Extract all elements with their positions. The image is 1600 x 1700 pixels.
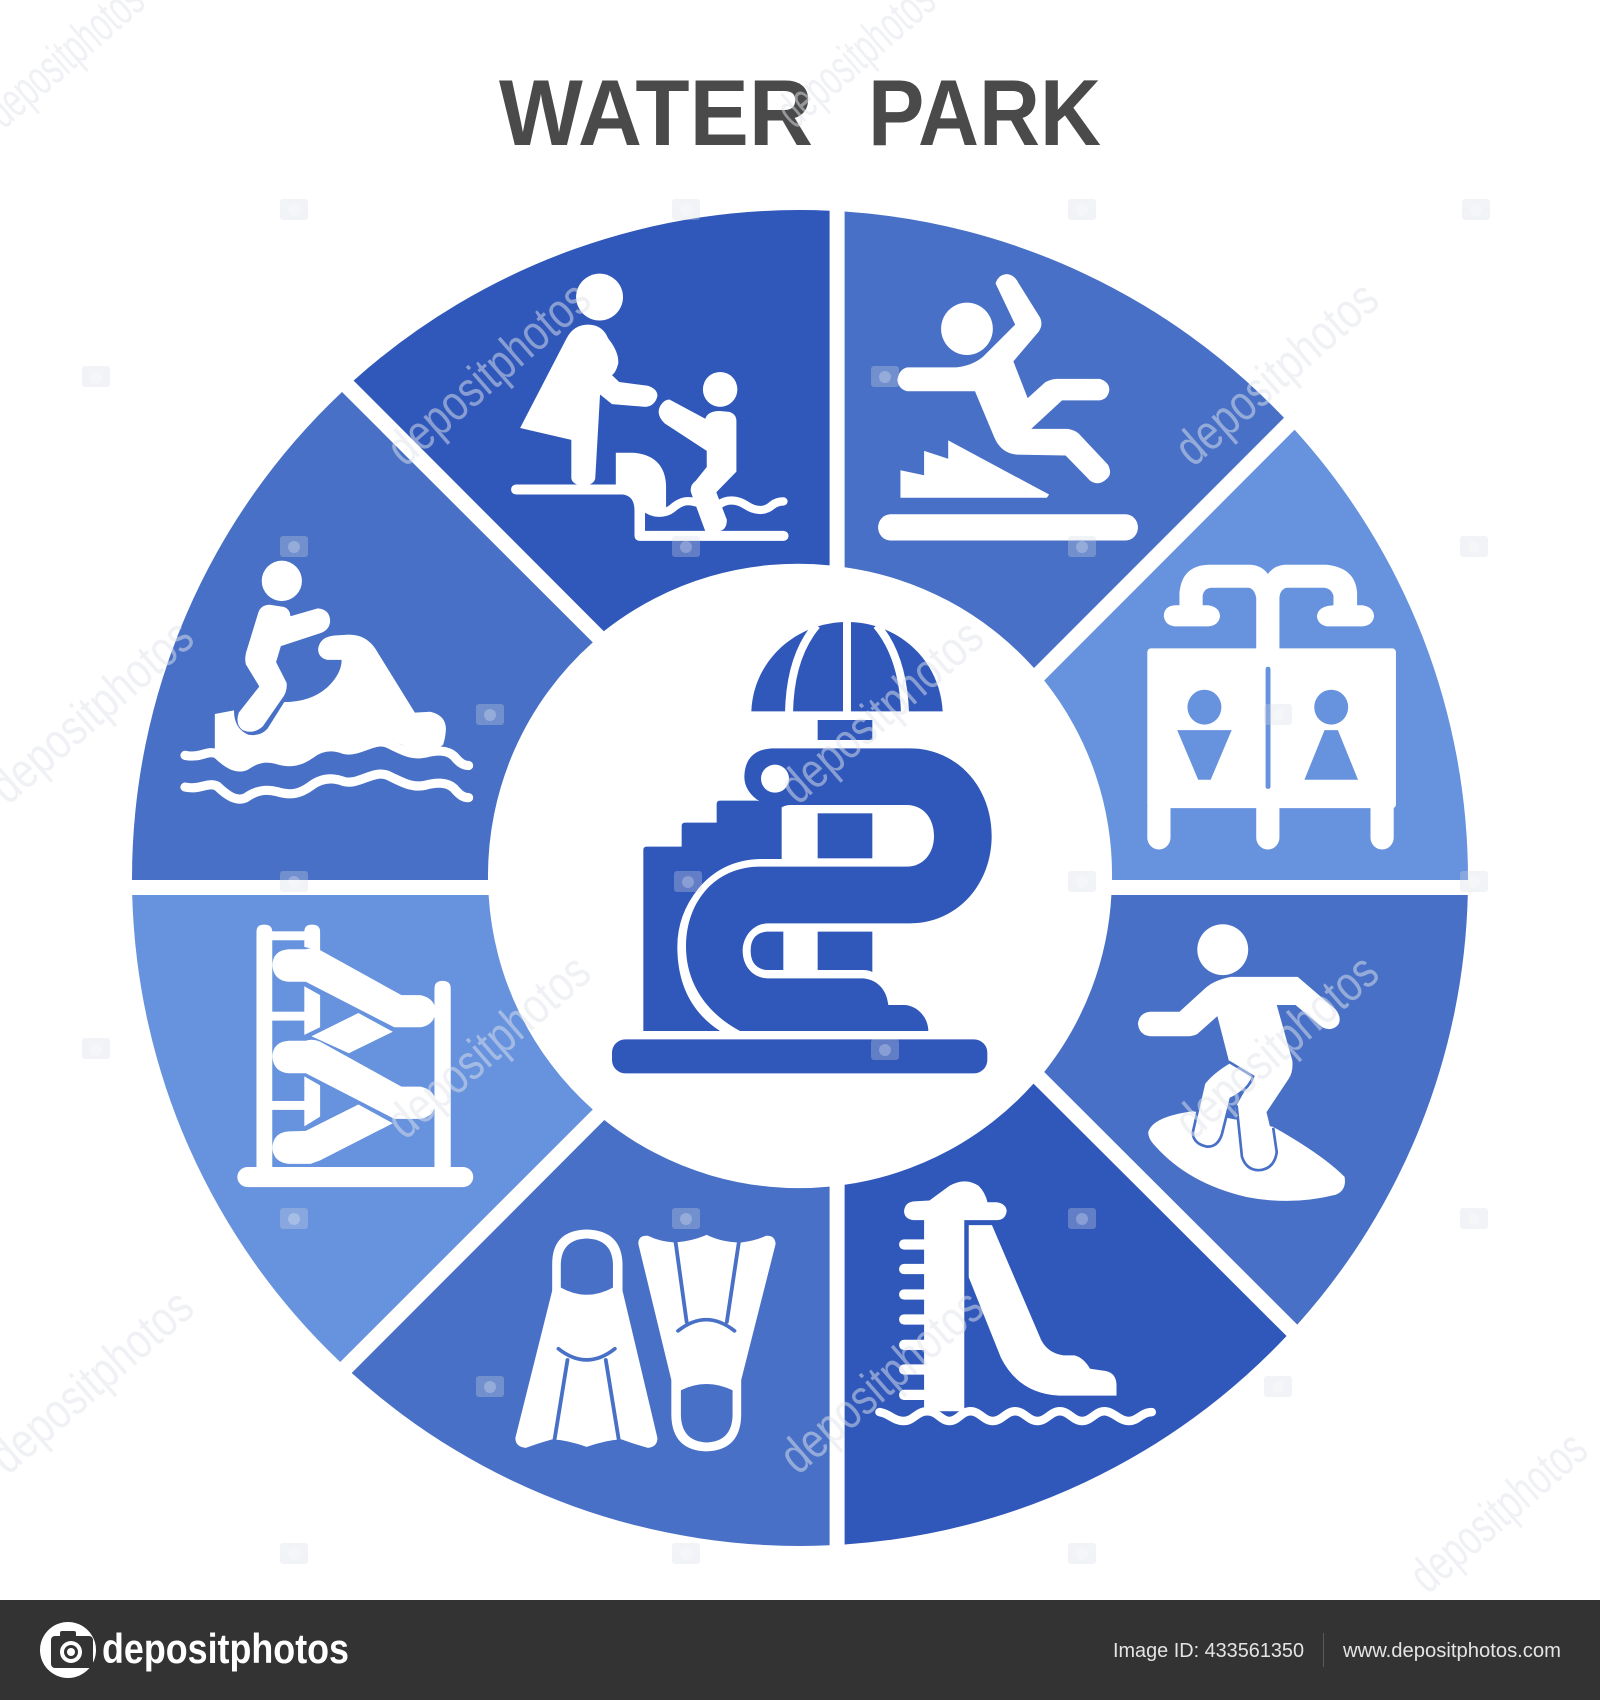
website: www.depositphotos.com	[1342, 1640, 1561, 1662]
watermark text: depositphotos	[375, 270, 601, 476]
panel: falling down slide	[845, 212, 1284, 668]
icon: surfer on board	[1138, 924, 1345, 1201]
icon: pair of fins	[515, 1230, 776, 1451]
sector	[1044, 895, 1468, 1325]
sector	[845, 212, 1284, 668]
brand name: depositphotos	[102, 1625, 349, 1672]
icon: central water slide with umbrella	[612, 620, 992, 1073]
watermark text: depositphotos	[1163, 270, 1389, 476]
icon: changing cabin with showers	[1147, 565, 1396, 850]
panel: swim fins	[352, 1120, 830, 1546]
image id: Image ID: 433561350	[1113, 1640, 1304, 1662]
icon: depositphotos logo	[40, 1622, 96, 1678]
sector	[1044, 430, 1468, 880]
panel: jet ski	[132, 392, 593, 880]
sector	[845, 1084, 1287, 1544]
title	[499, 60, 1101, 165]
sector	[354, 210, 830, 631]
watermark text: depositphotos	[375, 943, 601, 1149]
icon: slide tower in water	[879, 1181, 1152, 1421]
watermark text: depositphotos	[768, 1278, 994, 1484]
title: WATER	[499, 60, 813, 165]
icon: zigzag slide tower	[237, 925, 473, 1187]
icon: person on jet ski	[185, 561, 468, 799]
panel: tall slide	[845, 1084, 1287, 1544]
sector	[132, 392, 593, 880]
panel: adult helping child into pool	[354, 210, 830, 631]
icon: person slipping on stairs	[878, 274, 1138, 540]
footer bar	[0, 1600, 1600, 1700]
watermark text: depositphotos	[1163, 943, 1389, 1149]
title: PARK	[868, 60, 1101, 165]
panel: multi-level slide tower	[132, 895, 593, 1362]
sector	[132, 895, 593, 1362]
watermark text: depositphotos	[768, 608, 994, 814]
sector	[352, 1120, 830, 1546]
panel: surfer	[1044, 895, 1468, 1325]
watermark camera marks	[82, 199, 1490, 1564]
icon: adult and child at pool	[516, 274, 783, 536]
panel: restroom and showers	[1044, 430, 1468, 880]
